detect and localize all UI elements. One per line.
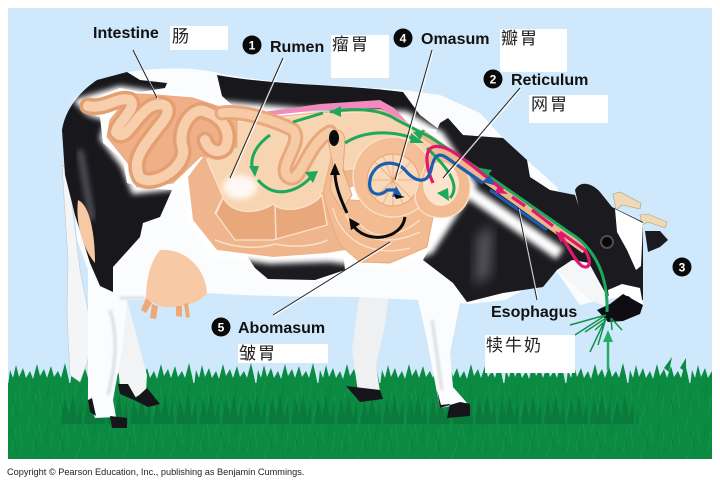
pink arrowhead [495, 186, 566, 243]
body [62, 68, 600, 418]
head shape [565, 184, 643, 300]
label: Intestine [93, 22, 228, 50]
label: Rumen: 1 [249, 38, 256, 52]
dark grass band [60, 392, 638, 424]
back black patch [217, 75, 440, 130]
label: Abomasum [212, 318, 328, 364]
label: Omasum: 4 [400, 32, 407, 46]
intestine coil dark [88, 99, 228, 180]
esophagus strip [420, 132, 585, 250]
label: Intestine: 肠 [172, 22, 191, 47]
rumen inner [207, 111, 440, 237]
rumen lobes [216, 195, 327, 240]
head group [557, 184, 668, 322]
pink dorsal band [263, 100, 407, 124]
nose [597, 294, 643, 322]
far hooves [118, 384, 383, 407]
eye [601, 236, 613, 248]
cow illustration [62, 68, 668, 428]
far ear [645, 231, 668, 252]
blue path [370, 155, 547, 230]
green arrowheads [249, 106, 492, 201]
teats [141, 298, 190, 319]
rump black patch [62, 72, 172, 292]
tall grass tufts [664, 357, 686, 372]
leg shading [108, 298, 442, 395]
label: Rumen [242, 30, 389, 78]
abomasum [323, 150, 433, 263]
pink path [427, 146, 589, 267]
label: Reticulum [484, 70, 608, 123]
udder [141, 250, 207, 319]
number 3 marker: 3 [679, 260, 686, 274]
neck gray highlight [475, 225, 492, 285]
intestine tube inner [222, 113, 330, 178]
label: Abomasum: 5 [218, 320, 225, 334]
far hind leg [113, 300, 147, 398]
label: milk [485, 331, 575, 373]
intestine mass [83, 93, 237, 187]
intestine coil light [88, 99, 228, 180]
green main path [330, 110, 607, 312]
blue and pink arrowheads [392, 175, 494, 197]
green arrows group [249, 106, 492, 201]
black arrows [335, 172, 405, 237]
grass arrow head [603, 330, 613, 342]
horns [613, 192, 667, 228]
white blaze [615, 209, 643, 270]
reticulum [415, 147, 470, 218]
omasum center [367, 154, 419, 206]
omasum leaves [367, 154, 419, 206]
intestine tube [222, 113, 330, 178]
label: Reticulum: 2 [490, 72, 497, 86]
pyloric duct [327, 130, 352, 210]
black arrowheads [330, 163, 405, 230]
grass ground [8, 357, 712, 459]
rumen outer [188, 109, 440, 257]
number 3 marker [672, 258, 692, 276]
label: Abomasum: 皱胃 [239, 339, 277, 364]
label: Omasum: 瓣胃 [501, 24, 539, 49]
pylorus [329, 130, 339, 146]
rumen highlight [223, 175, 257, 199]
copyright: Copyright © Pearson Education, Inc., publishing as Benjamin Cummings. [7, 467, 304, 477]
organ white glow [80, 90, 472, 266]
belly black patch [247, 250, 345, 280]
label: Intestine: Intestine [93, 25, 159, 42]
label: milk: 犊牛奶 [486, 331, 543, 356]
reticulum center [423, 162, 459, 206]
grass texture [8, 380, 712, 459]
digestive tract [83, 93, 607, 312]
label: Reticulum: Reticulum [511, 72, 588, 89]
throat white [557, 260, 610, 306]
label: Omasum: Omasum [421, 31, 489, 48]
grass blade tops [8, 362, 712, 386]
eaten grass in mouth [570, 315, 622, 370]
label: Rumen: 瘤胃 [332, 30, 370, 55]
tail [62, 165, 90, 382]
label: Abomasum: Abomasum [238, 320, 325, 337]
muzzle band [608, 284, 643, 305]
grass mass [8, 383, 712, 459]
leader lines [133, 50, 538, 316]
rump highlight [80, 150, 92, 220]
grass up arrow [607, 336, 609, 370]
label: Rumen: Rumen [270, 39, 324, 56]
rear peach patch [77, 200, 95, 263]
far front leg [352, 290, 390, 392]
omasum outer [353, 137, 433, 217]
label: Esophagus: Esophagus [491, 304, 577, 321]
neck white glow [462, 187, 560, 254]
abomasum folds [333, 208, 420, 251]
label: Omasum [394, 24, 567, 72]
label: Reticulum: 网胃 [531, 90, 569, 115]
neck black [423, 118, 590, 302]
near hooves [88, 390, 470, 428]
lobe highlights [215, 205, 328, 247]
